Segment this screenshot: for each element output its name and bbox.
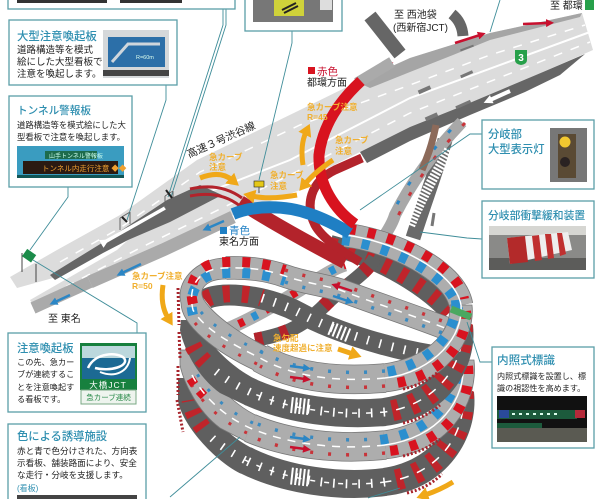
panel: 分岐部衝撃緩和装置 bbox=[482, 201, 594, 278]
icon: route 3 shield: 3 bbox=[518, 53, 524, 64]
text block bbox=[17, 357, 74, 404]
label: blue direction: 青色 bbox=[229, 224, 250, 237]
text block bbox=[17, 44, 103, 80]
panel: 注意喚起板 bbox=[8, 333, 146, 412]
curve warning labels: 急カーブ bbox=[335, 135, 369, 145]
curve warning arrows bbox=[162, 132, 453, 495]
curve warning labels: 注意 bbox=[335, 146, 353, 156]
label: destination 西池袋 bbox=[393, 8, 448, 34]
icon: 大橋JCT sign: 大橋JCT bbox=[89, 380, 127, 390]
panel: 色による誘導施設 bbox=[8, 424, 146, 499]
panel: 大型注意喚起板 bbox=[9, 20, 177, 85]
text block: この先、急カー bbox=[17, 357, 74, 367]
label: route name: 高速３号渋谷線 bbox=[185, 119, 258, 161]
panel: トンネル警報板 bbox=[9, 96, 132, 187]
curve warning labels bbox=[132, 102, 369, 353]
caption: (看板) bbox=[17, 483, 39, 493]
text block bbox=[497, 371, 586, 393]
small road signs bbox=[22, 181, 264, 282]
curve warning labels: 注意 bbox=[270, 181, 288, 191]
label: destination 都環 bbox=[550, 0, 594, 12]
road: dark red ramps bbox=[190, 158, 362, 262]
text block: 型看板で注意を喚起します。 bbox=[17, 132, 125, 142]
road: spiral third loop (light) bbox=[180, 350, 475, 459]
photo: illuminated sign bbox=[497, 396, 587, 442]
road: blue lane 東名方面 bbox=[233, 207, 350, 233]
curve warning labels: 急勾配 bbox=[273, 333, 299, 343]
heading: 色による誘導施設 bbox=[17, 429, 107, 443]
curve warning labels: 注意 bbox=[209, 162, 227, 172]
text block: 赤と青で色分けされた、方向表 bbox=[17, 445, 138, 456]
curve warning labels: 急カーブ注意 bbox=[307, 102, 358, 112]
leader lines bbox=[30, 0, 500, 498]
text block bbox=[17, 120, 126, 142]
curve warning labels: R=45 bbox=[307, 112, 328, 122]
label: destination 西池袋: (西新宿JCT) bbox=[393, 21, 448, 34]
label: red direction: 赤色 bbox=[317, 66, 338, 78]
photo: large warning sign bbox=[103, 30, 169, 78]
text block: ブが連続するこ bbox=[17, 369, 74, 379]
label: blue direction: 東名方面 bbox=[219, 235, 259, 248]
photo: tunnel sign: トンネル内走行注意 ◆◆ bbox=[42, 163, 127, 173]
arrows on main road bbox=[55, 23, 548, 302]
icon: route 3 shield bbox=[515, 50, 527, 65]
road: inner dark bands bbox=[205, 245, 450, 355]
text block: とを注意喚起す bbox=[17, 382, 74, 392]
heading bbox=[488, 127, 544, 156]
photo: large warning sign: R=60m bbox=[136, 55, 154, 61]
panel: top-center cropped photo panel bbox=[245, 0, 342, 31]
heading: トンネル警報板 bbox=[17, 104, 91, 117]
road: 首都高速3号渋谷線 main carriageways bbox=[10, 13, 593, 312]
photo: tunnel sign: 山手トンネル警報板 bbox=[49, 152, 103, 160]
text block: 注意を喚起します。 bbox=[17, 68, 102, 80]
curve warning labels: 急カーブ注意 bbox=[132, 271, 183, 281]
label: destination 東名: 至 東名 bbox=[48, 312, 81, 325]
road: junction ramp with hatch bbox=[378, 121, 465, 245]
heading: 大型表示灯 bbox=[488, 142, 544, 156]
panel: 分岐部大型表示灯 bbox=[482, 120, 594, 189]
photo strip bbox=[17, 495, 137, 499]
road: red lane 都環方面 bbox=[319, 62, 392, 224]
label: red direction: 都環方面 bbox=[307, 76, 347, 89]
icon: 大橋JCT sign bbox=[80, 343, 137, 404]
text block: 識の視認性を高めます。 bbox=[497, 383, 585, 393]
label: destination 都環: 至 都環 bbox=[550, 0, 583, 12]
text block bbox=[17, 445, 138, 480]
road edge: red warning hatching bbox=[177, 130, 442, 493]
heading: 分岐部 bbox=[488, 127, 522, 141]
road: spiral top light loop bbox=[180, 229, 472, 392]
curve warning labels: 急カーブ bbox=[270, 170, 304, 180]
label: destination 西池袋: 至 西池袋 bbox=[394, 8, 437, 21]
curve warning labels: 速度超過に注意 bbox=[273, 343, 333, 353]
label: red direction bbox=[307, 66, 347, 89]
text block: 示看板、舗装路面により、安全 bbox=[17, 457, 137, 468]
text block: な走行・分岐を支援します。 bbox=[17, 469, 128, 480]
heading: 大型注意喚起板 bbox=[17, 29, 97, 43]
road: spiral lowest dark loop bbox=[178, 378, 475, 496]
heading: 注意喚起板 bbox=[17, 341, 74, 355]
label: blue direction bbox=[219, 224, 259, 248]
heading: 分岐部衝撃緩和装置 bbox=[488, 208, 585, 222]
panel: top-left cropped photo panel bbox=[8, 0, 235, 9]
text block: る看板です。 bbox=[17, 394, 65, 404]
panel: 内照式標識 bbox=[492, 347, 594, 448]
photo: tunnel sign bbox=[17, 146, 127, 178]
curve warning labels: R=50 bbox=[132, 281, 153, 291]
icon: 大橋JCT sign: 急カーブ連続 bbox=[86, 392, 131, 402]
text block: 道路構造等を模式 bbox=[17, 44, 94, 56]
road: spiral second loop (dark) bbox=[180, 320, 473, 426]
photo: signal lamp bbox=[550, 128, 587, 182]
heading: 内照式標識 bbox=[497, 353, 555, 367]
text block: 内照式標識を設置し、標 bbox=[497, 371, 586, 381]
text block: 絵にした大型看板で bbox=[17, 56, 103, 68]
curve warning labels: 急カーブ bbox=[209, 152, 243, 162]
photo: crash cushion bbox=[489, 226, 586, 270]
text block: 道路構造等を模式絵にした大 bbox=[17, 120, 126, 130]
